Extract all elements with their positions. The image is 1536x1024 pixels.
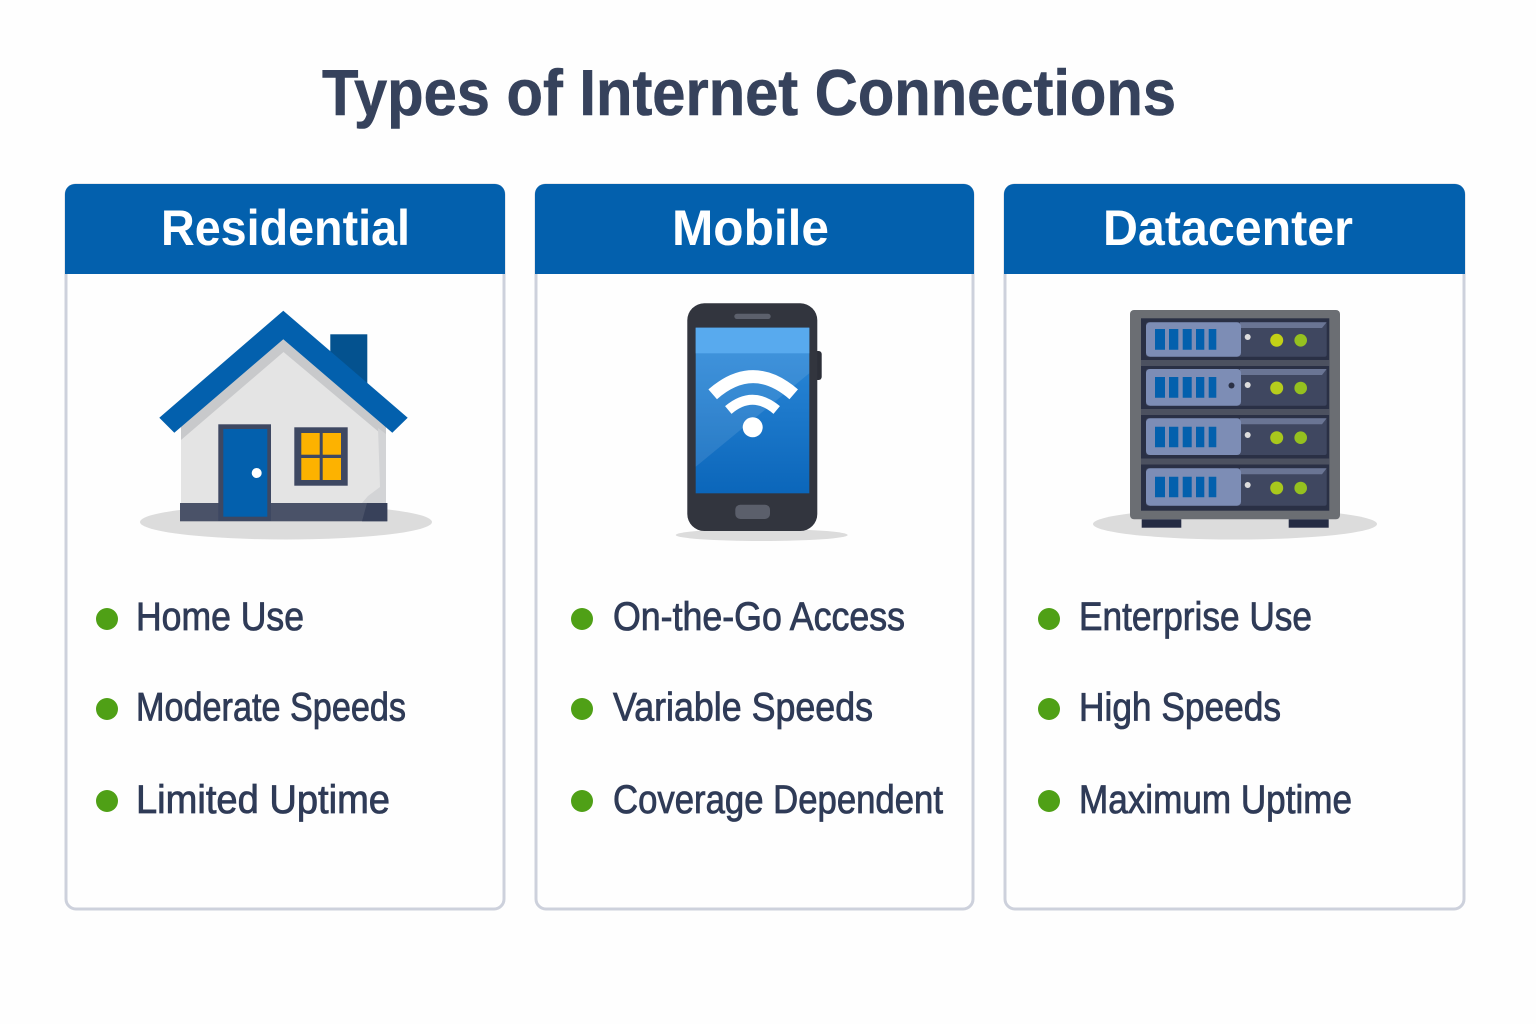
panel: datacenter [1004,184,1465,909]
server unit 3 [1146,418,1327,455]
bullet list: datacenter: Maximum Uptime [1079,778,1352,822]
header: datacenter [1004,184,1465,274]
icon: house [140,311,432,540]
bullet list: mobile: Variable Speeds [613,686,873,730]
header: datacenter: Datacenter [1103,200,1353,256]
server unit 4 [1146,468,1327,506]
title: Types of Internet Connections [322,56,1176,129]
bullet list: residential: Moderate Speeds [136,686,406,730]
header: residential: Residential [161,200,410,256]
bullet list: mobile: On-the-Go Access [613,595,905,639]
bullet list: datacenter: Enterprise Use [1079,595,1312,639]
bullet list: datacenter [1038,595,1352,822]
server unit 1 [1146,322,1327,357]
bullet list: residential: Home Use [136,595,304,639]
bullet list: residential: Limited Uptime [136,778,390,822]
header: mobile [535,184,974,274]
header: residential [65,184,505,274]
icon: smartphone with wifi [676,303,848,541]
bullet list: residential [96,595,406,822]
header: mobile: Mobile [672,200,829,256]
bullet list: mobile: Coverage Dependent [613,778,943,822]
panel: mobile [535,184,974,909]
bullet list: datacenter: High Speeds [1079,686,1281,730]
server unit 2 [1146,369,1327,406]
bullet list: mobile [571,595,943,822]
icon: server rack [1093,310,1377,540]
panel: residential [65,184,505,909]
